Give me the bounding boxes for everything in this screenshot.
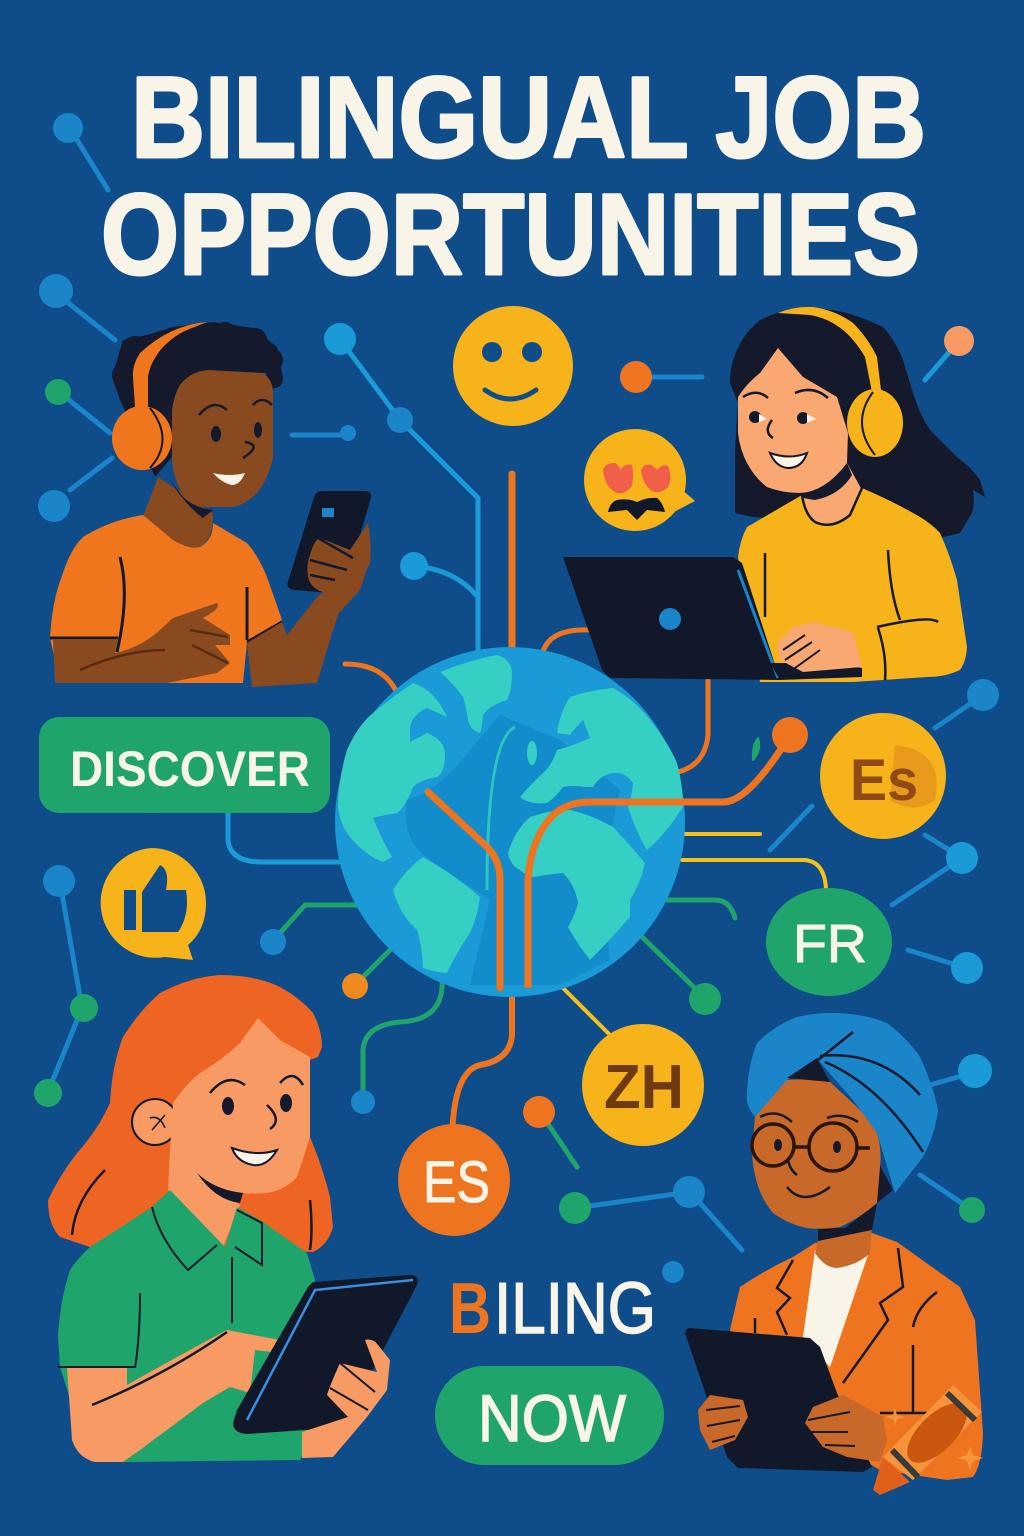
language badge: ZH: ZH — [604, 1053, 684, 1122]
discover badge — [39, 717, 330, 813]
blazer — [730, 1233, 983, 1480]
language badge: ES — [398, 1124, 510, 1236]
dark hair behind — [877, 1160, 893, 1203]
language badge: Es — [820, 713, 946, 839]
headphones — [133, 322, 207, 407]
neck shadow — [818, 1203, 877, 1241]
hair — [112, 322, 283, 477]
turban hair wedge — [787, 1058, 830, 1082]
neck — [815, 1227, 872, 1268]
hands — [698, 1395, 748, 1450]
neck shadow — [170, 480, 213, 518]
biling label: ILING — [494, 1269, 656, 1349]
hand — [777, 622, 862, 672]
turban — [747, 1013, 938, 1193]
person: boy with phone — [50, 322, 371, 687]
sweater — [738, 488, 967, 682]
language badge: Es: Es — [850, 748, 918, 813]
left arm and hand — [53, 603, 230, 683]
icon: thumbs up bubble — [101, 848, 206, 960]
neck — [168, 1150, 240, 1247]
now button — [435, 1366, 664, 1465]
face — [774, 1139, 782, 1151]
right arm — [247, 523, 371, 687]
network nodes — [34, 113, 999, 1283]
neck — [143, 477, 213, 548]
shirt seams — [50, 557, 282, 652]
face — [749, 411, 761, 423]
glasses — [752, 1123, 870, 1171]
globe circuit lines — [428, 735, 790, 988]
right hand — [302, 1340, 390, 1458]
person: woman with laptop — [563, 307, 985, 682]
head — [170, 1018, 310, 1194]
discover badge: DISCOVER — [70, 741, 310, 797]
darker ocean — [406, 715, 620, 985]
person: man with turban and tablet — [685, 1013, 983, 1480]
face — [211, 426, 221, 442]
hand on phone — [307, 523, 369, 612]
arm — [67, 1330, 280, 1462]
turban folds — [818, 1032, 923, 1152]
hair — [48, 975, 333, 1252]
person: red-haired woman with tablet — [48, 975, 418, 1462]
emoji: heart eyes — [584, 429, 695, 531]
language badge: ES: ES — [423, 1150, 490, 1215]
language badge: FR: FR — [793, 914, 867, 974]
now button: NOW — [478, 1381, 627, 1455]
hair strands — [72, 1170, 312, 1250]
head — [738, 348, 848, 493]
neck — [802, 463, 862, 527]
tablet — [233, 1275, 418, 1434]
shirt — [50, 515, 282, 683]
emoji: smile — [453, 306, 573, 426]
language badge: ZH — [582, 1024, 704, 1146]
ear — [132, 1099, 178, 1145]
icon: crayon — [873, 1385, 983, 1495]
lapels and seams — [755, 1248, 937, 1413]
hair — [730, 308, 985, 538]
biling label: B — [449, 1269, 491, 1349]
neck shadow — [800, 463, 852, 500]
globe — [335, 647, 790, 997]
shirt — [58, 1190, 330, 1462]
collar and seams — [58, 1207, 262, 1368]
headphones — [778, 307, 881, 392]
language badge: FR — [766, 888, 892, 996]
tablet — [685, 1328, 872, 1472]
laptop — [563, 557, 780, 680]
sweater seams — [765, 488, 938, 680]
teal inner curve — [487, 727, 515, 890]
white shirt — [803, 1250, 868, 1367]
phone — [288, 491, 371, 593]
network connector lines — [48, 135, 983, 1250]
head — [752, 1079, 881, 1229]
title: OPPORTUNITIES — [101, 171, 920, 299]
title: BILINGUAL JOB — [131, 54, 926, 182]
biling label — [449, 1269, 656, 1349]
land masses — [338, 655, 683, 973]
chin shadow — [197, 1173, 243, 1203]
head — [172, 370, 273, 507]
face — [222, 1097, 234, 1115]
title — [101, 54, 926, 299]
